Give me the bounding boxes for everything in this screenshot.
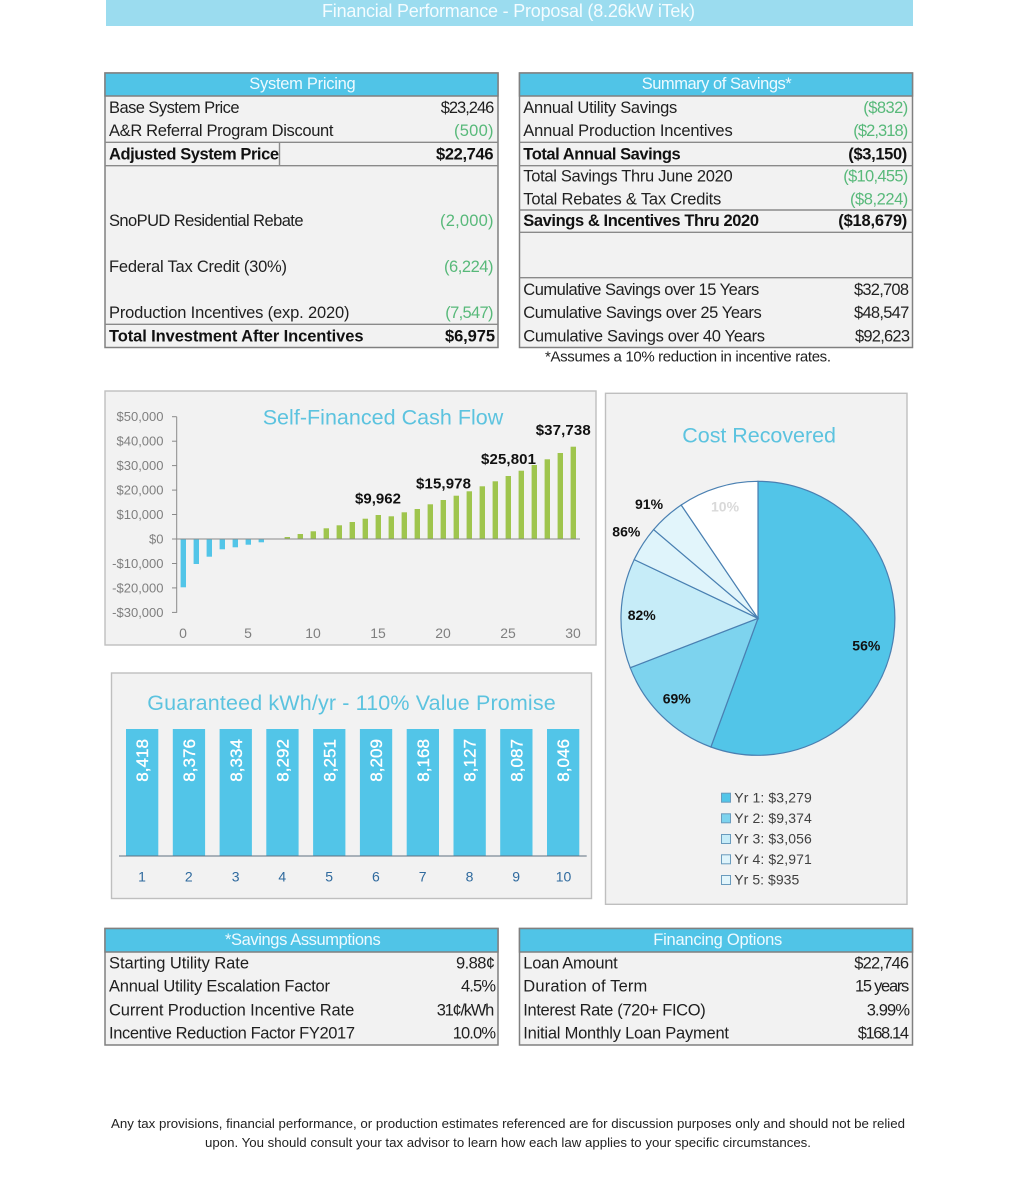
pie chart [621, 481, 895, 755]
row: base system price [109, 99, 494, 117]
x axis labels: 15 [370, 625, 386, 641]
legend: Yr 3: $3,056 [734, 831, 812, 847]
row: total rebates and tax credits: Total Rebates & Tax Credits [523, 190, 721, 208]
row: total investment: $6,975 [445, 328, 495, 346]
row: current production incentive rate: Current Production Incentive Rate [109, 1002, 354, 1020]
negative cash flow bars [181, 539, 264, 587]
row: total annual savings [523, 145, 907, 163]
kwh bars [126, 729, 579, 856]
heading: system pricing [105, 73, 498, 96]
row: total rebates and tax credits [523, 190, 908, 208]
row: base system price: $23,246 [441, 99, 494, 117]
pie labels: 91% [635, 496, 664, 512]
y axis: $50,000 [116, 409, 164, 424]
row: annual production incentives: ($2,318) [853, 122, 908, 140]
row: total investment [109, 328, 495, 346]
y axis: $30,000 [116, 458, 164, 473]
row: interest rate [523, 1002, 910, 1020]
row: production incentives: (7,547) [445, 304, 494, 322]
chart title: cash flow: Self-Financed Cash Flow [263, 405, 504, 429]
x axis year labels: 3 [232, 869, 240, 885]
heading: savings assumptions: *Savings Assumptions [225, 931, 381, 949]
legend: Yr 4: $2,971 [734, 851, 812, 867]
data labels: $25,801 [481, 451, 536, 468]
x axis year labels: 1 [138, 869, 146, 885]
heading: financing options [520, 928, 912, 952]
pie labels: 82% [628, 607, 656, 623]
y axis: $0 [149, 532, 164, 546]
bar value labels [133, 739, 573, 782]
x axis year labels: 5 [325, 869, 333, 885]
row: annual production incentives [523, 122, 908, 140]
row: initial monthly loan payment [523, 1024, 909, 1042]
panel: savings assumptions table [105, 928, 498, 1045]
row: adjusted system price [109, 145, 494, 163]
disclaimer text [111, 1117, 905, 1150]
row: cumulative savings 15 years: $32,708 [854, 281, 909, 299]
x axis labels: 20 [435, 625, 451, 641]
row: incentive reduction factor [109, 1024, 496, 1042]
row: starting utility rate [109, 954, 495, 972]
row: loan amount: $22,746 [854, 954, 909, 972]
x axis year labels: 2 [185, 869, 193, 885]
row: total savings thru june 2020: Total Savings Thru June 2020 [523, 168, 733, 186]
bar value labels: 8,168 [414, 739, 433, 782]
row: referral discount: (500) [454, 122, 494, 140]
row: cumulative savings 15 years [523, 281, 909, 299]
y axis: -$30,000 [112, 605, 164, 620]
x axis year labels: 6 [372, 869, 380, 885]
row: annual production incentives: Annual Production Incentives [523, 122, 733, 140]
row: initial monthly loan payment: Initial Monthly Loan Payment [523, 1024, 729, 1042]
row: production incentives [109, 304, 494, 322]
legend: Yr 2: $9,374 [734, 810, 812, 826]
pie labels [612, 496, 881, 706]
heading: financing options: Financing Options [653, 931, 782, 949]
title banner: Financial Performance - Proposal (8.26kW iTek) [322, 1, 695, 21]
row: referral discount: A&R Referral Program Discount [109, 122, 334, 140]
row: savings and incentives thru 2020: ($18,679) [838, 212, 907, 230]
bar value labels: 8,087 [507, 739, 526, 782]
pie labels: 56% [852, 638, 881, 654]
row: starting utility rate: 9.88¢ [456, 954, 495, 972]
heading: savings assumptions [105, 928, 498, 952]
row: total investment: Total Investment After Incentives [109, 328, 364, 346]
panel: self-financed cash flow chart [105, 391, 596, 645]
legend: Yr 1: $3,279 [734, 790, 812, 806]
bar value labels: 8,418 [133, 739, 152, 782]
bar value labels: 8,376 [180, 739, 199, 782]
x axis labels: 0 [179, 625, 187, 641]
heading: summary of savings: Summary of Savings* [642, 75, 792, 93]
row: savings and incentives thru 2020 [523, 212, 907, 230]
row: cumulative savings 25 years: $48,547 [854, 304, 909, 322]
row: total annual savings: Total Annual Savings [523, 145, 681, 163]
row: cumulative savings 40 years: $92,623 [855, 328, 910, 346]
row: interest rate: Interest Rate (720+ FICO) [523, 1002, 706, 1020]
row: adjusted system price: $22,746 [436, 145, 494, 163]
pie labels: 69% [663, 690, 691, 706]
chart title: cost recovered: Cost Recovered [682, 424, 836, 448]
row: cumulative savings 40 years: Cumulative Savings over 40 Years [523, 328, 765, 346]
row: total annual savings: ($3,150) [848, 145, 907, 163]
x axis year labels: 7 [419, 869, 427, 885]
row: initial monthly loan payment: $168.14 [858, 1024, 909, 1042]
disclaimer text: upon. You should consult your tax advisor to learn how each law applies to your specific circumstances. [205, 1136, 811, 1150]
row: cumulative savings 25 years [523, 304, 909, 322]
row: production incentives: Production Incentives (exp. 2020) [109, 304, 350, 322]
row: cumulative savings 25 years: Cumulative Savings over 25 Years [523, 304, 762, 322]
row: loan amount [523, 954, 909, 972]
panel: summary of savings table [520, 73, 912, 348]
legend [722, 790, 812, 888]
x axis year labels [138, 869, 571, 885]
y axis: $10,000 [116, 507, 164, 522]
row: federal tax credit: (6,224) [444, 258, 494, 276]
row: annual utility savings [523, 99, 908, 117]
row: annual utility escalation: Annual Utility Escalation Factor [109, 978, 330, 996]
x axis year labels: 4 [278, 869, 286, 885]
row: incentive reduction factor: 10.0% [453, 1024, 496, 1042]
row: current production incentive rate: 31¢/kWh [437, 1002, 494, 1020]
row: snopud rebate: SnoPUD Residential Rebate [109, 212, 304, 230]
bar value labels: 8,292 [274, 739, 292, 782]
row: current production incentive rate [109, 1002, 494, 1020]
y axis: $20,000 [116, 482, 164, 498]
y axis [112, 409, 177, 620]
bar value labels: 8,334 [227, 739, 246, 782]
row: federal tax credit: Federal Tax Credit (30%) [109, 258, 287, 276]
row: savings and incentives thru 2020: Savings & Incentives Thru 2020 [523, 212, 759, 230]
row: base system price: Base System Price [109, 99, 240, 117]
data labels: $9,962 [355, 490, 401, 507]
footnote: incentive rate assumption: *Assumes a 10% reduction in incentive rates. [545, 349, 831, 366]
row: annual utility savings: ($832) [863, 99, 908, 117]
pie labels: 10% [711, 499, 740, 515]
x axis year labels: 8 [466, 869, 474, 885]
row: interest rate: 3.99% [867, 1002, 910, 1020]
row: snopud rebate: (2,000) [440, 212, 494, 230]
x axis labels: 30 [565, 625, 581, 641]
legend: Yr 5: $935 [734, 872, 800, 888]
row: loan amount: Loan Amount [523, 954, 618, 972]
row: federal tax credit [109, 258, 494, 276]
x axis year labels: 9 [512, 869, 520, 885]
row: annual utility escalation: 4.5% [461, 978, 496, 996]
row: duration of term [523, 978, 909, 996]
panel: system pricing table [105, 73, 498, 348]
bar value labels: 8,046 [554, 739, 573, 782]
row: snopud rebate [109, 212, 494, 230]
row: incentive reduction factor: Incentive Reduction Factor FY2017 [109, 1024, 355, 1042]
row: cumulative savings 40 years [523, 328, 910, 346]
x axis labels: 5 [244, 625, 252, 641]
bar value labels: 8,251 [320, 739, 339, 782]
panel: financing options table [520, 928, 912, 1045]
x axis labels: 10 [305, 625, 321, 641]
heading: system pricing: System Pricing [249, 75, 356, 93]
bar value labels: 8,127 [461, 739, 480, 782]
disclaimer text: Any tax provisions, financial performance, or production estimates referenced are for discussion purposes only and should not be relied [111, 1117, 905, 1131]
row: duration of term: 15 years [855, 978, 909, 996]
row: annual utility savings: Annual Utility Savings [523, 99, 677, 117]
panel: guaranteed kwh bar chart [112, 673, 592, 898]
row: cumulative savings 15 years: Cumulative Savings over 15 Years [523, 281, 759, 299]
row: adjusted system price: Adjusted System Price [109, 145, 279, 163]
positive cash flow bars [285, 447, 576, 539]
pie labels: 86% [612, 524, 641, 540]
bar value labels: 8,209 [367, 739, 386, 782]
x axis labels [179, 625, 581, 641]
heading: summary of savings [520, 73, 912, 96]
y axis: -$20,000 [112, 580, 164, 596]
x axis year labels: 10 [556, 869, 571, 885]
row: total savings thru june 2020: ($10,455) [843, 168, 908, 186]
row: total savings thru june 2020 [523, 168, 908, 186]
y axis: -$10,000 [112, 556, 164, 571]
data labels [355, 422, 591, 507]
y axis: $40,000 [116, 434, 164, 448]
row: annual utility escalation [109, 978, 496, 996]
chart title: value promise: Guaranteed kWh/yr - 110% Value Promise [147, 691, 556, 715]
x axis labels: 25 [500, 625, 516, 641]
row: starting utility rate: Starting Utility Rate [109, 954, 249, 972]
data labels: $15,978 [416, 475, 471, 492]
row: referral discount [109, 122, 494, 140]
title banner [106, 0, 913, 26]
data labels: $37,738 [536, 422, 591, 439]
row: total rebates and tax credits: ($8,224) [850, 190, 908, 208]
panel: cost recovered pie chart [606, 393, 907, 904]
row: duration of term: Duration of Term [523, 978, 647, 996]
